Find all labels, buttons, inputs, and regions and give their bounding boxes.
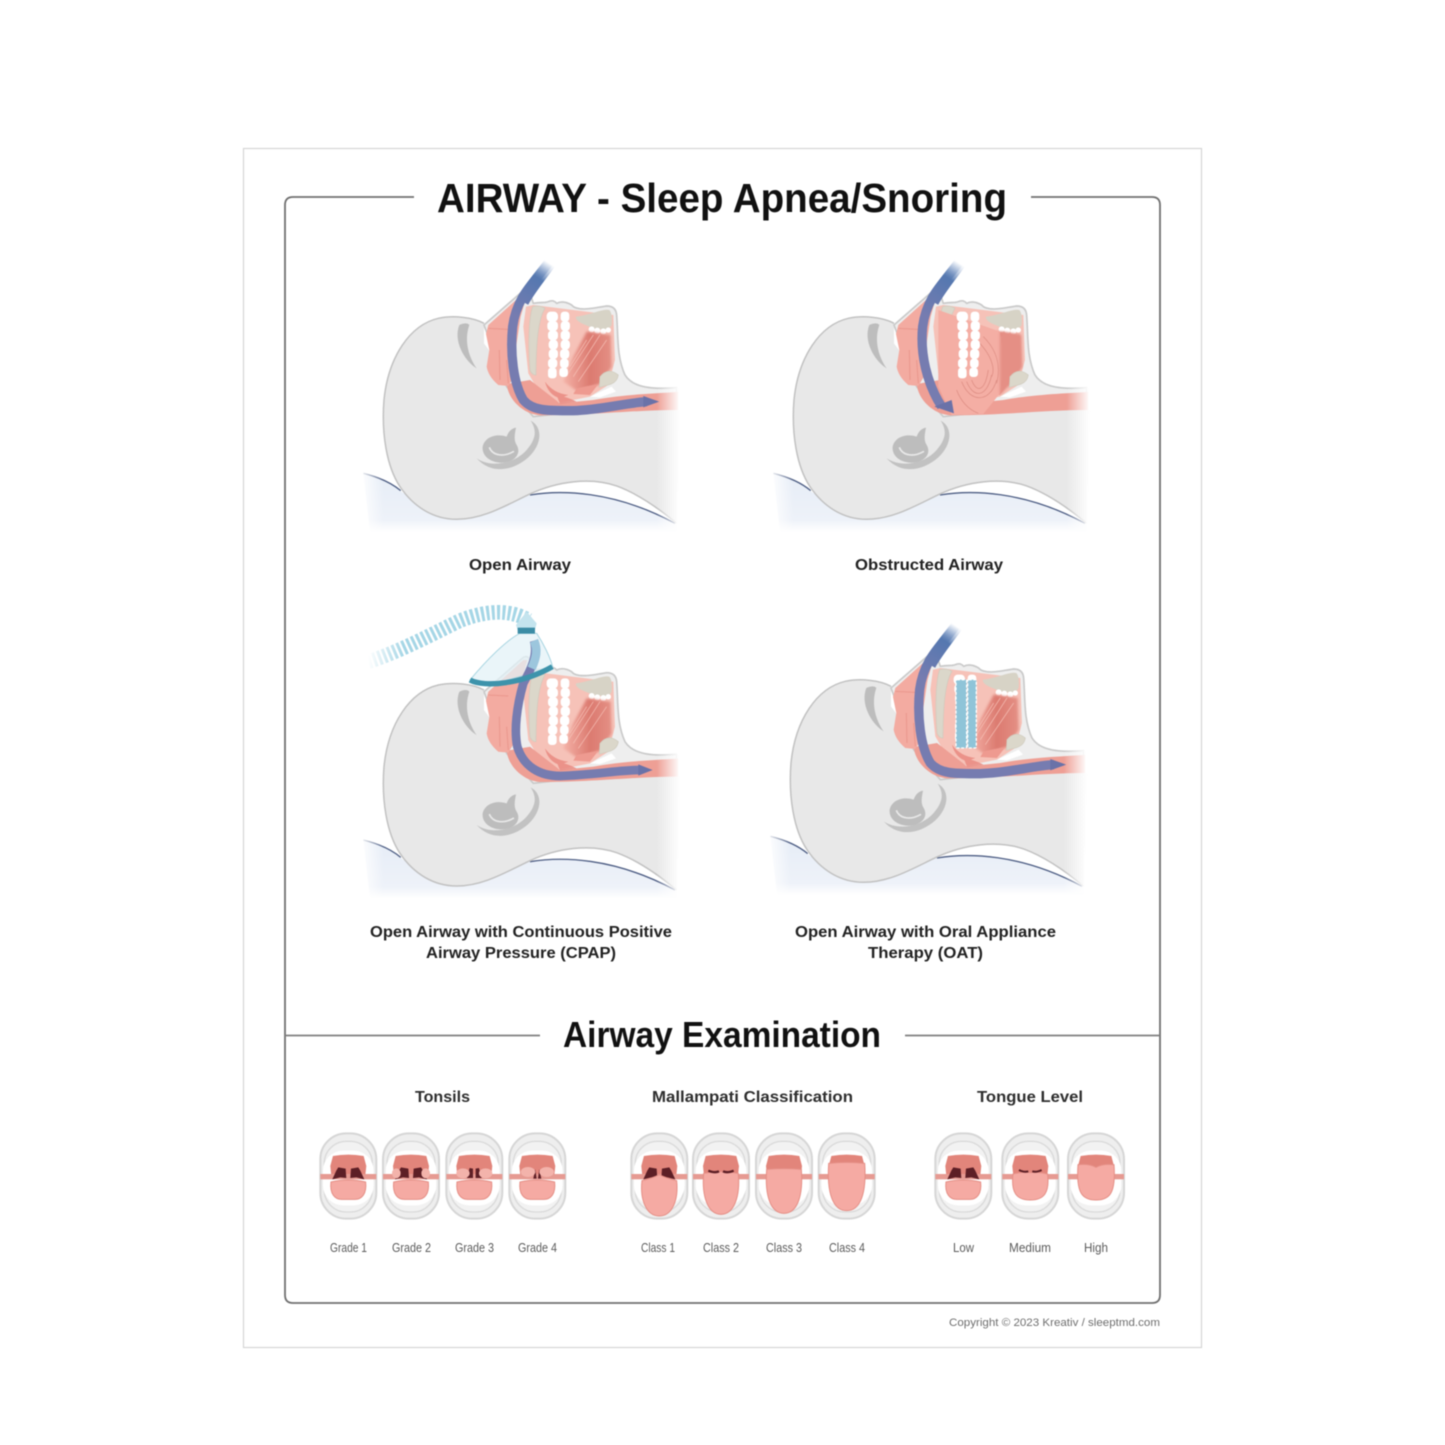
labels: tongue levels: Medium	[1009, 1240, 1051, 1255]
icon: grade 3	[446, 1133, 502, 1219]
labels: tongue levels: High	[1084, 1240, 1108, 1255]
panel: tonsils	[320, 1089, 565, 1255]
labels: classes: Class 2	[703, 1240, 739, 1255]
icon: class 2	[693, 1133, 749, 1219]
content frame	[285, 197, 1160, 1303]
heading: mallampati: Mallampati Classification	[652, 1089, 853, 1106]
panel: mallampati	[631, 1089, 875, 1255]
title: AIRWAY - Sleep Apnea/Snoring	[437, 175, 1007, 221]
heading: tonsils: Tonsils	[415, 1089, 470, 1106]
panel: CPAP	[360, 612, 680, 962]
icon: class 4	[819, 1133, 875, 1219]
icon: class 3	[756, 1133, 812, 1219]
icon: grade 1	[320, 1133, 376, 1219]
labels: grades: Grade 1	[330, 1240, 367, 1255]
heading: airway examination: Airway Examination	[563, 1014, 881, 1055]
CPAP mask and hose	[368, 612, 653, 776]
labels: tongue levels: Low	[953, 1240, 975, 1255]
labels: tongue levels	[953, 1240, 1108, 1255]
panel: oral appliance	[767, 626, 1087, 962]
labels: grades: Grade 4	[518, 1240, 557, 1255]
panel: open airway	[360, 263, 680, 574]
page sheet	[244, 148, 1202, 1348]
icon: grade 4	[509, 1133, 565, 1219]
labels: grades	[330, 1240, 557, 1255]
caption: oral appliance	[795, 924, 1056, 962]
icon: low	[935, 1133, 991, 1219]
caption: oral appliance: Open Airway with Oral Appliance	[795, 924, 1056, 941]
labels: classes: Class 3	[766, 1240, 802, 1255]
labels: classes: Class 4	[829, 1240, 865, 1255]
caption: CPAP: Open Airway with Continuous Positive	[370, 924, 672, 941]
caption: obstructed airway: Obstructed Airway	[855, 557, 1003, 574]
labels: classes: Class 1	[641, 1240, 675, 1255]
panel: tongue level	[935, 1089, 1124, 1255]
caption: CPAP	[370, 924, 672, 962]
heading: tongue level: Tongue Level	[977, 1089, 1083, 1106]
icon: grade 2	[383, 1133, 439, 1219]
panel: obstructed airway	[770, 263, 1090, 574]
icon: class 1	[631, 1133, 687, 1219]
caption: oral appliance: Therapy (OAT)	[868, 945, 983, 962]
labels: classes	[641, 1240, 865, 1255]
copyright: Copyright © 2023 Kreativ / sleeptmd.com	[949, 1317, 1160, 1329]
icon: medium	[1002, 1133, 1058, 1219]
icon: high	[1068, 1133, 1124, 1219]
labels: grades: Grade 3	[455, 1240, 494, 1255]
section divider	[285, 1034, 1160, 1036]
caption: open airway: Open Airway	[469, 557, 571, 574]
labels: grades: Grade 2	[392, 1240, 431, 1255]
caption: CPAP: Airway Pressure (CPAP)	[426, 945, 616, 962]
